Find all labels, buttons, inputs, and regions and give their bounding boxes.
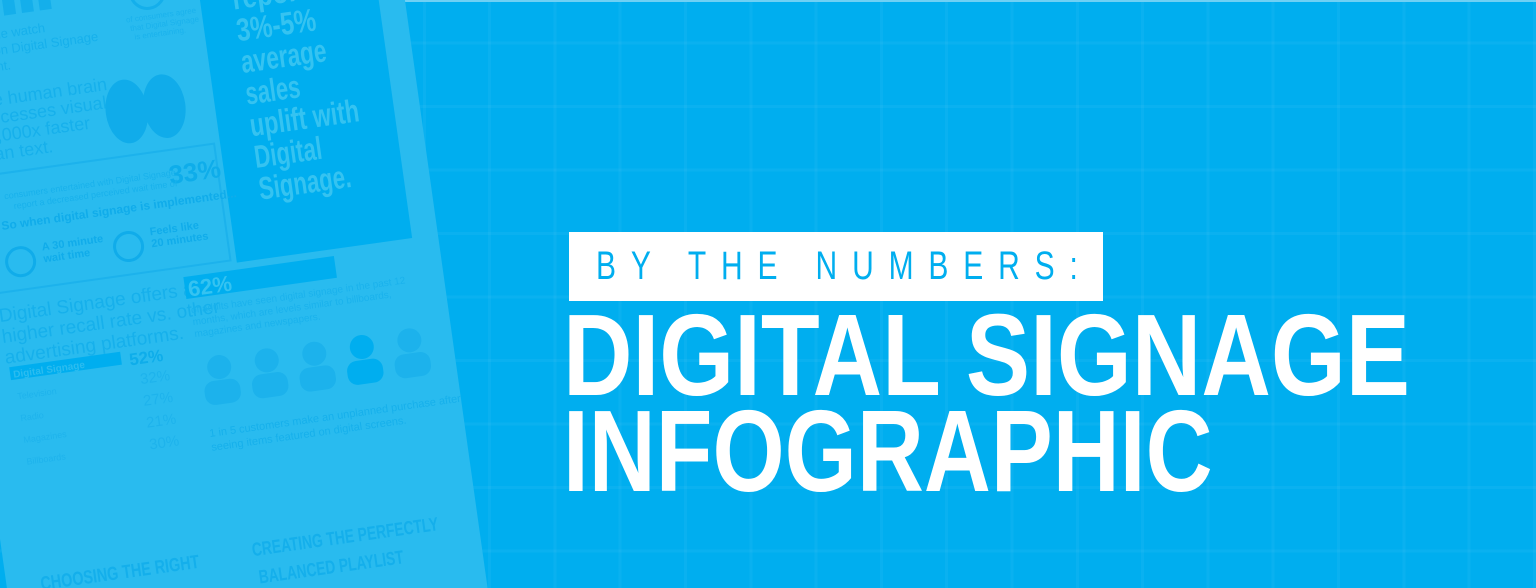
panel: wait time box <box>0 141 246 298</box>
chart: recall rate <box>0 276 239 472</box>
panel: wait time box: 33% <box>167 153 223 190</box>
chart: recall rate: Radio <box>20 410 44 423</box>
heading tag: by the numbers: BY THE NUMBERS: <box>596 244 1093 288</box>
title <box>563 307 1410 507</box>
text: unplanned purchase: seeing items featured on digital screens. <box>211 415 407 454</box>
chart: recall rate: 27% <box>142 389 174 410</box>
panel: 62% adults: 62% <box>186 271 233 302</box>
heading: playlist: CREATING THE PERFECTLY <box>251 514 440 561</box>
chart: recall rate: Magazines <box>23 429 68 445</box>
panel: wait time box: A 30 minute <box>41 233 104 254</box>
panel: sales uplift box: Digital <box>252 130 324 175</box>
panel: sales uplift box: sales <box>243 68 302 112</box>
icon: brain <box>101 72 190 146</box>
panel: wait time box: So when digital signage is implemented... <box>0 186 238 233</box>
chart: recall rate: higher recall rate vs. other <box>1 296 222 348</box>
chart: recall rate: 21% <box>145 411 177 432</box>
panel: sales uplift box: Signage. <box>256 158 353 207</box>
panel: 62% adults: months, which are levels similar to billboards, <box>192 289 392 328</box>
panel: wait time box: 20 minutes <box>151 230 209 250</box>
panel: 62% adults <box>183 247 410 341</box>
chart: recall rate: Digital Signage <box>13 360 86 381</box>
icon: people row <box>200 326 432 406</box>
panel: wait time box: report a decreased perceived wait time of <box>13 178 178 211</box>
chart: recall rate: Billboards <box>26 451 67 467</box>
heading: playlist <box>251 514 444 588</box>
text: consumers agree: of consumers agree <box>125 6 197 25</box>
chart: recall rate: 30% <box>148 432 180 453</box>
panel: wait time box: consumers entertained with Digital Signage <box>4 167 176 201</box>
panel: sales uplift box: uplift with <box>247 92 361 143</box>
chart: recall rate: advertising platforms. <box>3 323 185 369</box>
panel: 62% adults: of adults have seen digital signage in the past 12 <box>190 275 406 316</box>
panel: 62% adults: magazines and newspapers. <box>194 312 321 340</box>
icon: circle <box>128 0 166 11</box>
icon: people row top <box>0 0 52 26</box>
text: human brain <box>0 73 122 166</box>
chart: recall rate: 52% <box>128 346 164 369</box>
panel: wait time box: Feels like <box>149 220 200 238</box>
text: consumers agree: is entertaining. <box>134 25 187 42</box>
panel: wait time box: wait time <box>42 247 91 266</box>
text: consumers agree <box>125 6 201 42</box>
chart: recall rate: Digital Signage offers a <box>0 279 195 327</box>
heading tag: by the numbers <box>569 232 1103 301</box>
chart: recall rate: Television <box>17 386 57 401</box>
text: consumers agree: that Digital Signage <box>130 14 200 33</box>
chart: recall rate: 32% <box>139 367 171 388</box>
text: unplanned purchase: 1 in 5 customers make an unplanned purchase after <box>209 393 462 440</box>
panel: sales uplift box: average <box>238 32 329 80</box>
text: people watch <box>0 13 101 84</box>
heading: playlist: BALANCED PLAYLIST <box>258 547 405 588</box>
panel: sales uplift box <box>154 0 412 263</box>
